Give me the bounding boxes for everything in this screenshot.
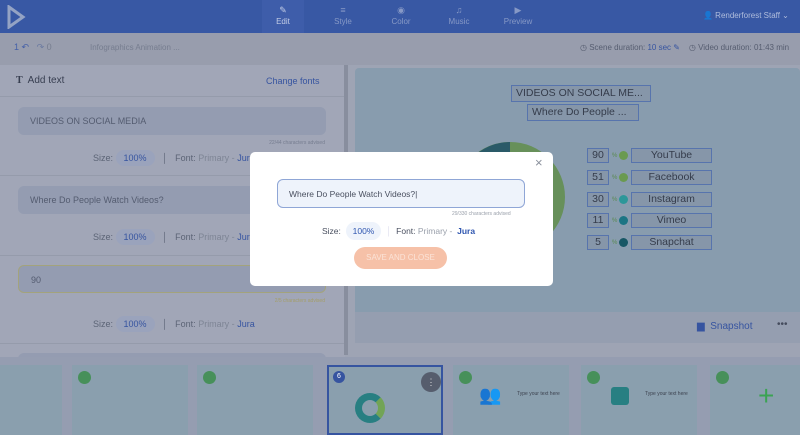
filmstrip: + xyxy=(758,380,774,411)
left panel: text fields: Size: │ Font: Primary - Jura xyxy=(93,232,255,242)
size/font row: Size: │ Font: Primary - Jura xyxy=(322,226,475,236)
preview panel: % xyxy=(612,218,617,224)
left panel: text fields: 100% xyxy=(124,232,147,242)
preview panel: Snapchat xyxy=(649,236,694,248)
tab: color: Color xyxy=(391,17,411,26)
tab: style: Style xyxy=(334,17,352,26)
tab: music: ♫ xyxy=(456,5,462,15)
left panel: text fields: Size: │ Font: Primary - Jura xyxy=(93,319,255,329)
field 2: Where Do People Watch Videos? xyxy=(30,195,164,205)
preview panel: Facebook xyxy=(648,171,695,183)
scrollbar xyxy=(344,65,348,355)
tab: style: ≡ xyxy=(340,5,346,15)
top navigation bar xyxy=(0,0,800,33)
filmstrip: Type your text here xyxy=(517,391,560,397)
preview panel: Instagram xyxy=(648,193,695,205)
filmstrip: 👥 xyxy=(479,385,501,405)
close icon: × xyxy=(535,155,543,170)
preview subtitle xyxy=(527,104,639,121)
durations: ◷ Scene duration: 10 sec ✎ ◷ Video duration: 01:43 min xyxy=(580,43,789,52)
filmstrip xyxy=(0,357,800,435)
preview footer xyxy=(355,312,800,343)
left panel: text fields: Size: │ Font: Primary - Jura xyxy=(93,153,255,163)
project name: Infographics Animation ... xyxy=(90,43,180,52)
left panel: text fields: Change fonts xyxy=(266,76,320,86)
preview panel: % xyxy=(612,175,617,181)
preview panel: 11 xyxy=(593,214,603,226)
preview panel: 90 xyxy=(592,149,604,161)
filmstrip: Type your text here xyxy=(645,391,688,397)
left panel: text fields: 100% xyxy=(124,319,147,329)
tab: preview xyxy=(504,5,532,26)
preview subtitle: Where Do People ... xyxy=(532,106,627,118)
save button xyxy=(354,247,447,269)
panel header: T Add text xyxy=(16,75,64,86)
left panel: text fields xyxy=(0,65,345,357)
selected thumbnail: 6 xyxy=(337,373,341,380)
tab: preview: Preview xyxy=(504,17,532,26)
text input xyxy=(277,179,525,208)
left panel: text fields: 22/44 characters advised xyxy=(269,140,325,146)
tab: color xyxy=(391,5,411,26)
pie chart xyxy=(478,142,565,231)
preview panel: 30 xyxy=(592,193,604,205)
left panel: text fields: 100% xyxy=(124,153,147,163)
tab: music: Music xyxy=(449,17,469,26)
preview panel: Vimeo xyxy=(657,214,686,226)
field 1 xyxy=(18,107,326,135)
preview panel: % xyxy=(612,153,617,159)
preview panel: YouTube xyxy=(651,149,692,161)
field 1: VIDEOS ON SOCIAL MEDIA xyxy=(30,116,146,126)
modal dialog xyxy=(250,152,553,286)
user menu: 👤 Renderforest Staff ⌄ xyxy=(703,11,789,20)
toolbar xyxy=(0,33,800,65)
preview title: VIDEOS ON SOCIAL ME... xyxy=(516,87,643,99)
preview panel: % xyxy=(612,197,617,203)
size/font row xyxy=(322,222,476,240)
field 3: 90 xyxy=(31,275,41,285)
legend xyxy=(587,148,712,250)
field 3 xyxy=(18,265,326,293)
field 2 xyxy=(18,186,326,214)
save button: SAVE AND CLOSE xyxy=(366,253,435,262)
preview panel: 5 xyxy=(595,236,601,248)
preview panel xyxy=(355,68,800,343)
tab: edit: ✎ xyxy=(279,5,287,15)
size/font row: 100% xyxy=(353,226,374,236)
text input: Where Do People Watch Videos?| xyxy=(289,189,417,199)
tab: preview: ▶ xyxy=(515,5,521,15)
logo xyxy=(8,5,26,29)
tab: edit xyxy=(262,0,304,33)
preview title xyxy=(511,85,651,102)
selected thumbnail: ⋮ xyxy=(426,377,436,387)
tab: edit: Edit xyxy=(276,17,290,26)
preview panel: 51 xyxy=(592,171,604,183)
tab: music xyxy=(449,5,470,26)
preview footer: ▆ Snapshot xyxy=(697,321,753,332)
preview footer: ••• xyxy=(777,319,788,330)
tab: color: ◉ xyxy=(397,5,405,15)
left panel: text fields: 2/5 characters advised xyxy=(275,298,325,304)
selected thumbnail xyxy=(327,365,443,435)
undo redo: 1 ↶ ↷ 0 xyxy=(14,42,52,52)
tab: style xyxy=(334,5,352,26)
preview panel: % xyxy=(612,240,617,246)
modal dialog: 29/330 characters advised xyxy=(452,211,511,217)
